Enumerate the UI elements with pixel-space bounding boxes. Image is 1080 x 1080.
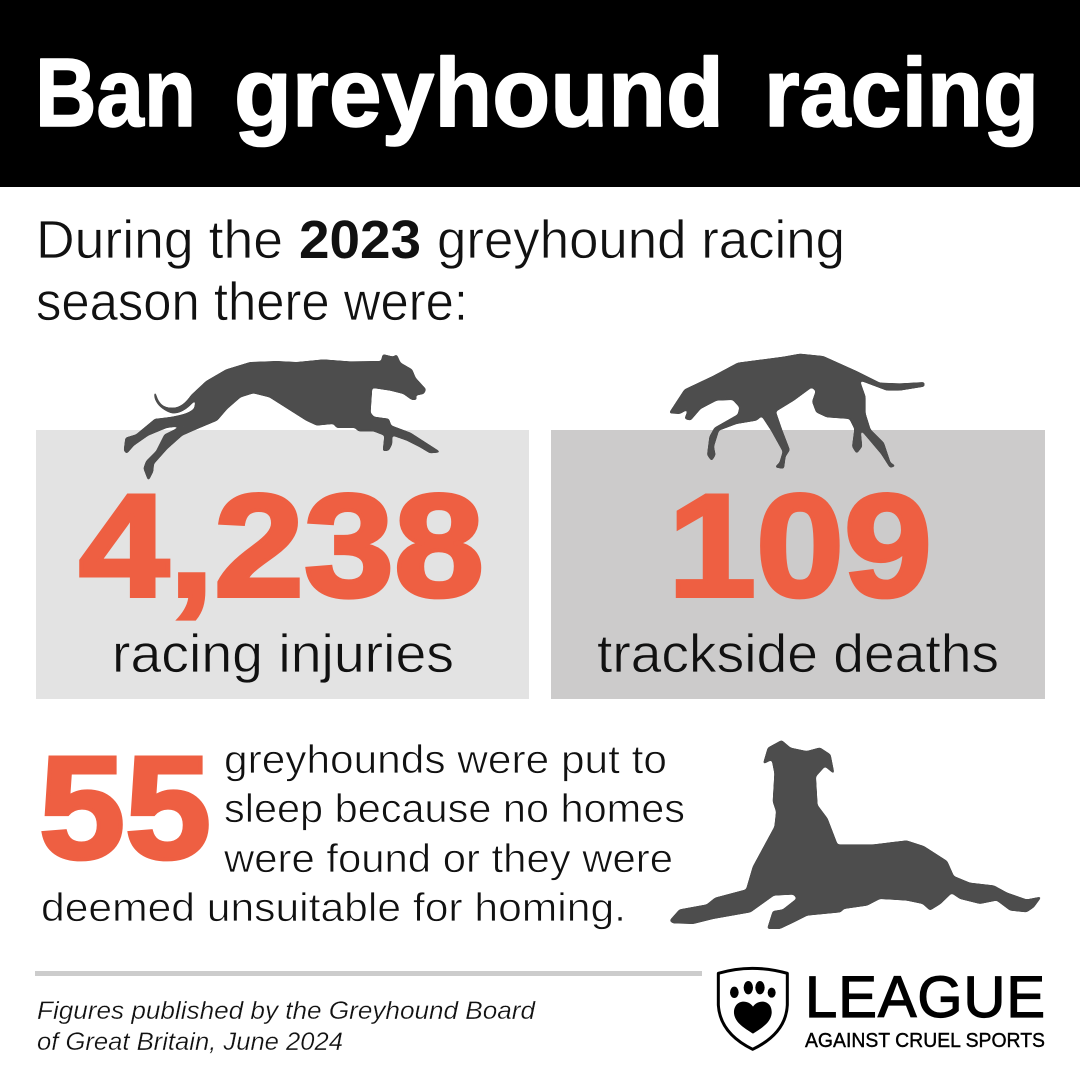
divider rule [35,971,702,976]
intro text: During the [36,210,283,270]
panel: trackside deaths [551,430,1045,699]
intro text [36,210,845,332]
intro text: 2023 [299,210,421,270]
intro text: greyhound racing [437,210,845,270]
source note [37,997,536,1056]
label: racing injuries: racing injuries [112,624,454,684]
title: racing [764,38,1039,147]
label: trackside deaths: trackside deaths [597,624,999,684]
icon: lying greyhound [669,740,1042,929]
title banner [0,0,1080,187]
text: put to sleep statement [41,738,685,930]
text: put to sleep statement: deemed unsuitable for homing. [41,886,626,930]
intro text: season there were: [36,272,468,332]
wordmark: LEAGUE: LEAGUE [805,965,1045,1030]
source note: Figures published by the Greyhound Board [37,997,536,1025]
title [35,38,1039,147]
icon: running greyhound [124,354,441,481]
stat: 55: 55 [39,726,211,889]
title: Ban [35,38,196,147]
text: put to sleep statement: sleep because no homes [224,787,685,831]
logo: League Against Cruel Sports [718,965,1045,1052]
stat: 4,238: 4,238 [79,464,484,627]
panel: racing injuries [36,430,529,699]
source note: of Great Britain, June 2024 [37,1028,343,1056]
text: put to sleep statement: greyhounds were put to [224,738,667,782]
title: greyhound [234,38,724,147]
icon: shield with paw [718,968,787,1049]
icon: limping greyhound [669,354,925,469]
text: put to sleep statement: were found or they were [223,837,673,881]
stat: 109: 109 [668,464,932,627]
wordmark: AGAINST CRUEL SPORTS: AGAINST CRUEL SPORTS [805,1030,1045,1052]
